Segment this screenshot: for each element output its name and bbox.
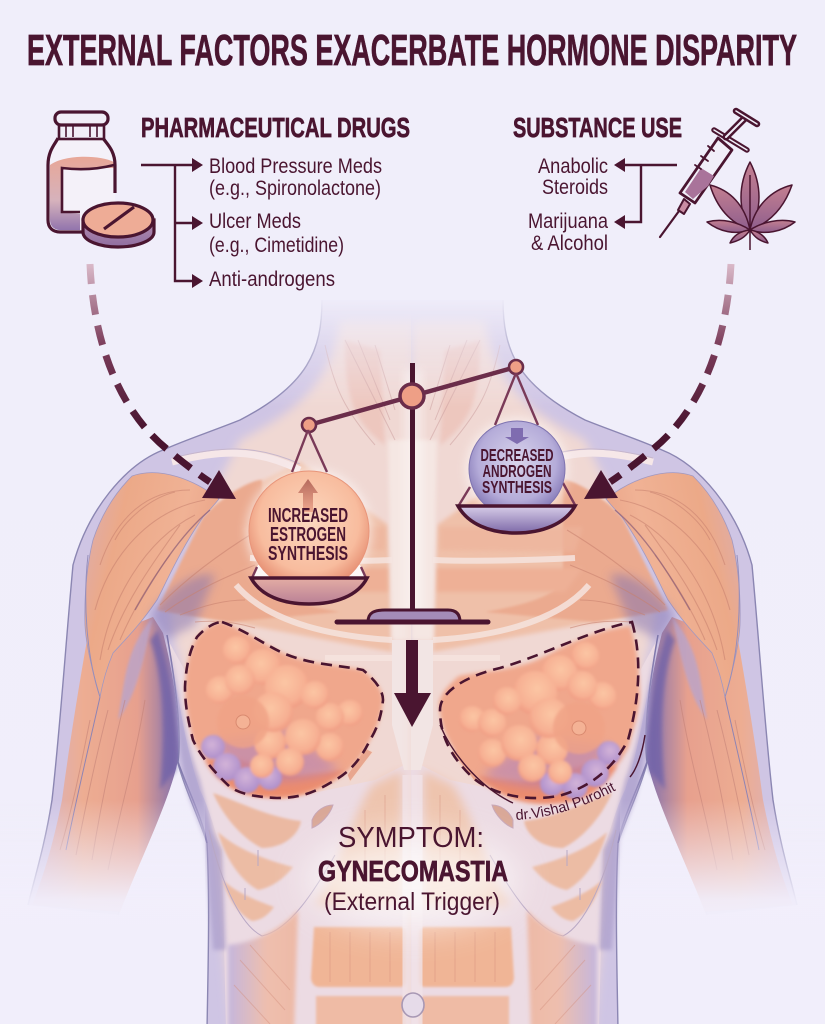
substance list: & Alcohol: [531, 232, 608, 255]
symptom label: [318, 822, 508, 916]
arm bottom fades: [27, 807, 205, 916]
dashed outline: right breast: [440, 622, 638, 798]
drug list: [209, 155, 382, 291]
substance list: Marijuana: [528, 210, 608, 233]
navel: [402, 993, 424, 1017]
symptom label: SYMPTOM:: [338, 822, 484, 854]
right nipple: [553, 702, 605, 754]
right breast tissue: [439, 626, 640, 804]
substance list: [528, 155, 608, 255]
right sphere: androgen: SYNTHESIS: [482, 477, 552, 497]
icon: cannabis leaf: [707, 162, 795, 250]
symptom label: GYNECOMASTIA: [318, 856, 508, 888]
beam: [309, 367, 516, 425]
right pan: [458, 506, 575, 533]
drug list: Blood Pressure Meds: [209, 155, 382, 178]
heading: substance use: SUBSTANCE USE: [513, 112, 682, 143]
drug list: Ulcer Meds: [209, 210, 301, 233]
left breast tissue: [185, 622, 383, 798]
pill: [83, 203, 154, 247]
right sphere: androgen: [469, 421, 565, 517]
body illustration: [0, 300, 825, 1024]
right sphere: androgen: DECREASED: [480, 445, 554, 465]
right sphere: androgen: ANDROGEN: [482, 461, 552, 481]
pivot: [400, 384, 424, 408]
glow behind scale and label: [246, 370, 568, 926]
icon: medicine bottle and pill: [48, 112, 154, 247]
substance list: Steroids: [542, 176, 608, 199]
left sphere: estrogen: ESTROGEN: [270, 524, 346, 546]
arrow: right dashed: [584, 264, 731, 499]
drug list: (e.g., Cimetidine): [209, 234, 344, 257]
balance scale: [249, 360, 575, 622]
arrow: left dashed: [90, 264, 236, 499]
left sphere: estrogen: SYNTHESIS: [268, 543, 348, 565]
post: [410, 363, 415, 612]
substance list: Anabolic: [538, 155, 608, 178]
symptom label: (External Trigger): [324, 888, 500, 916]
left sphere: estrogen: [249, 471, 369, 591]
left sphere: estrogen: INCREASED: [268, 505, 348, 527]
icon: syringe: [660, 111, 757, 237]
signature: [439, 725, 646, 820]
base: [368, 610, 460, 622]
left nipple: [217, 696, 269, 748]
drug list: Anti-androgens: [209, 268, 335, 291]
right pan hangers: [459, 373, 575, 505]
left pan: [251, 578, 367, 604]
drug list: (e.g., Spironolactone): [209, 177, 381, 200]
substance list arrows: [614, 158, 677, 229]
signature: dr.Vishal Purohit: [516, 782, 616, 820]
drug list arrows: [141, 158, 203, 288]
left pan hangers: [252, 565, 366, 578]
arrow: down to symptom: [394, 640, 431, 727]
heading: pharmaceutical drugs: PHARMACEUTICAL DRUGS: [141, 112, 410, 143]
dashed outline: left breast: [185, 622, 383, 798]
